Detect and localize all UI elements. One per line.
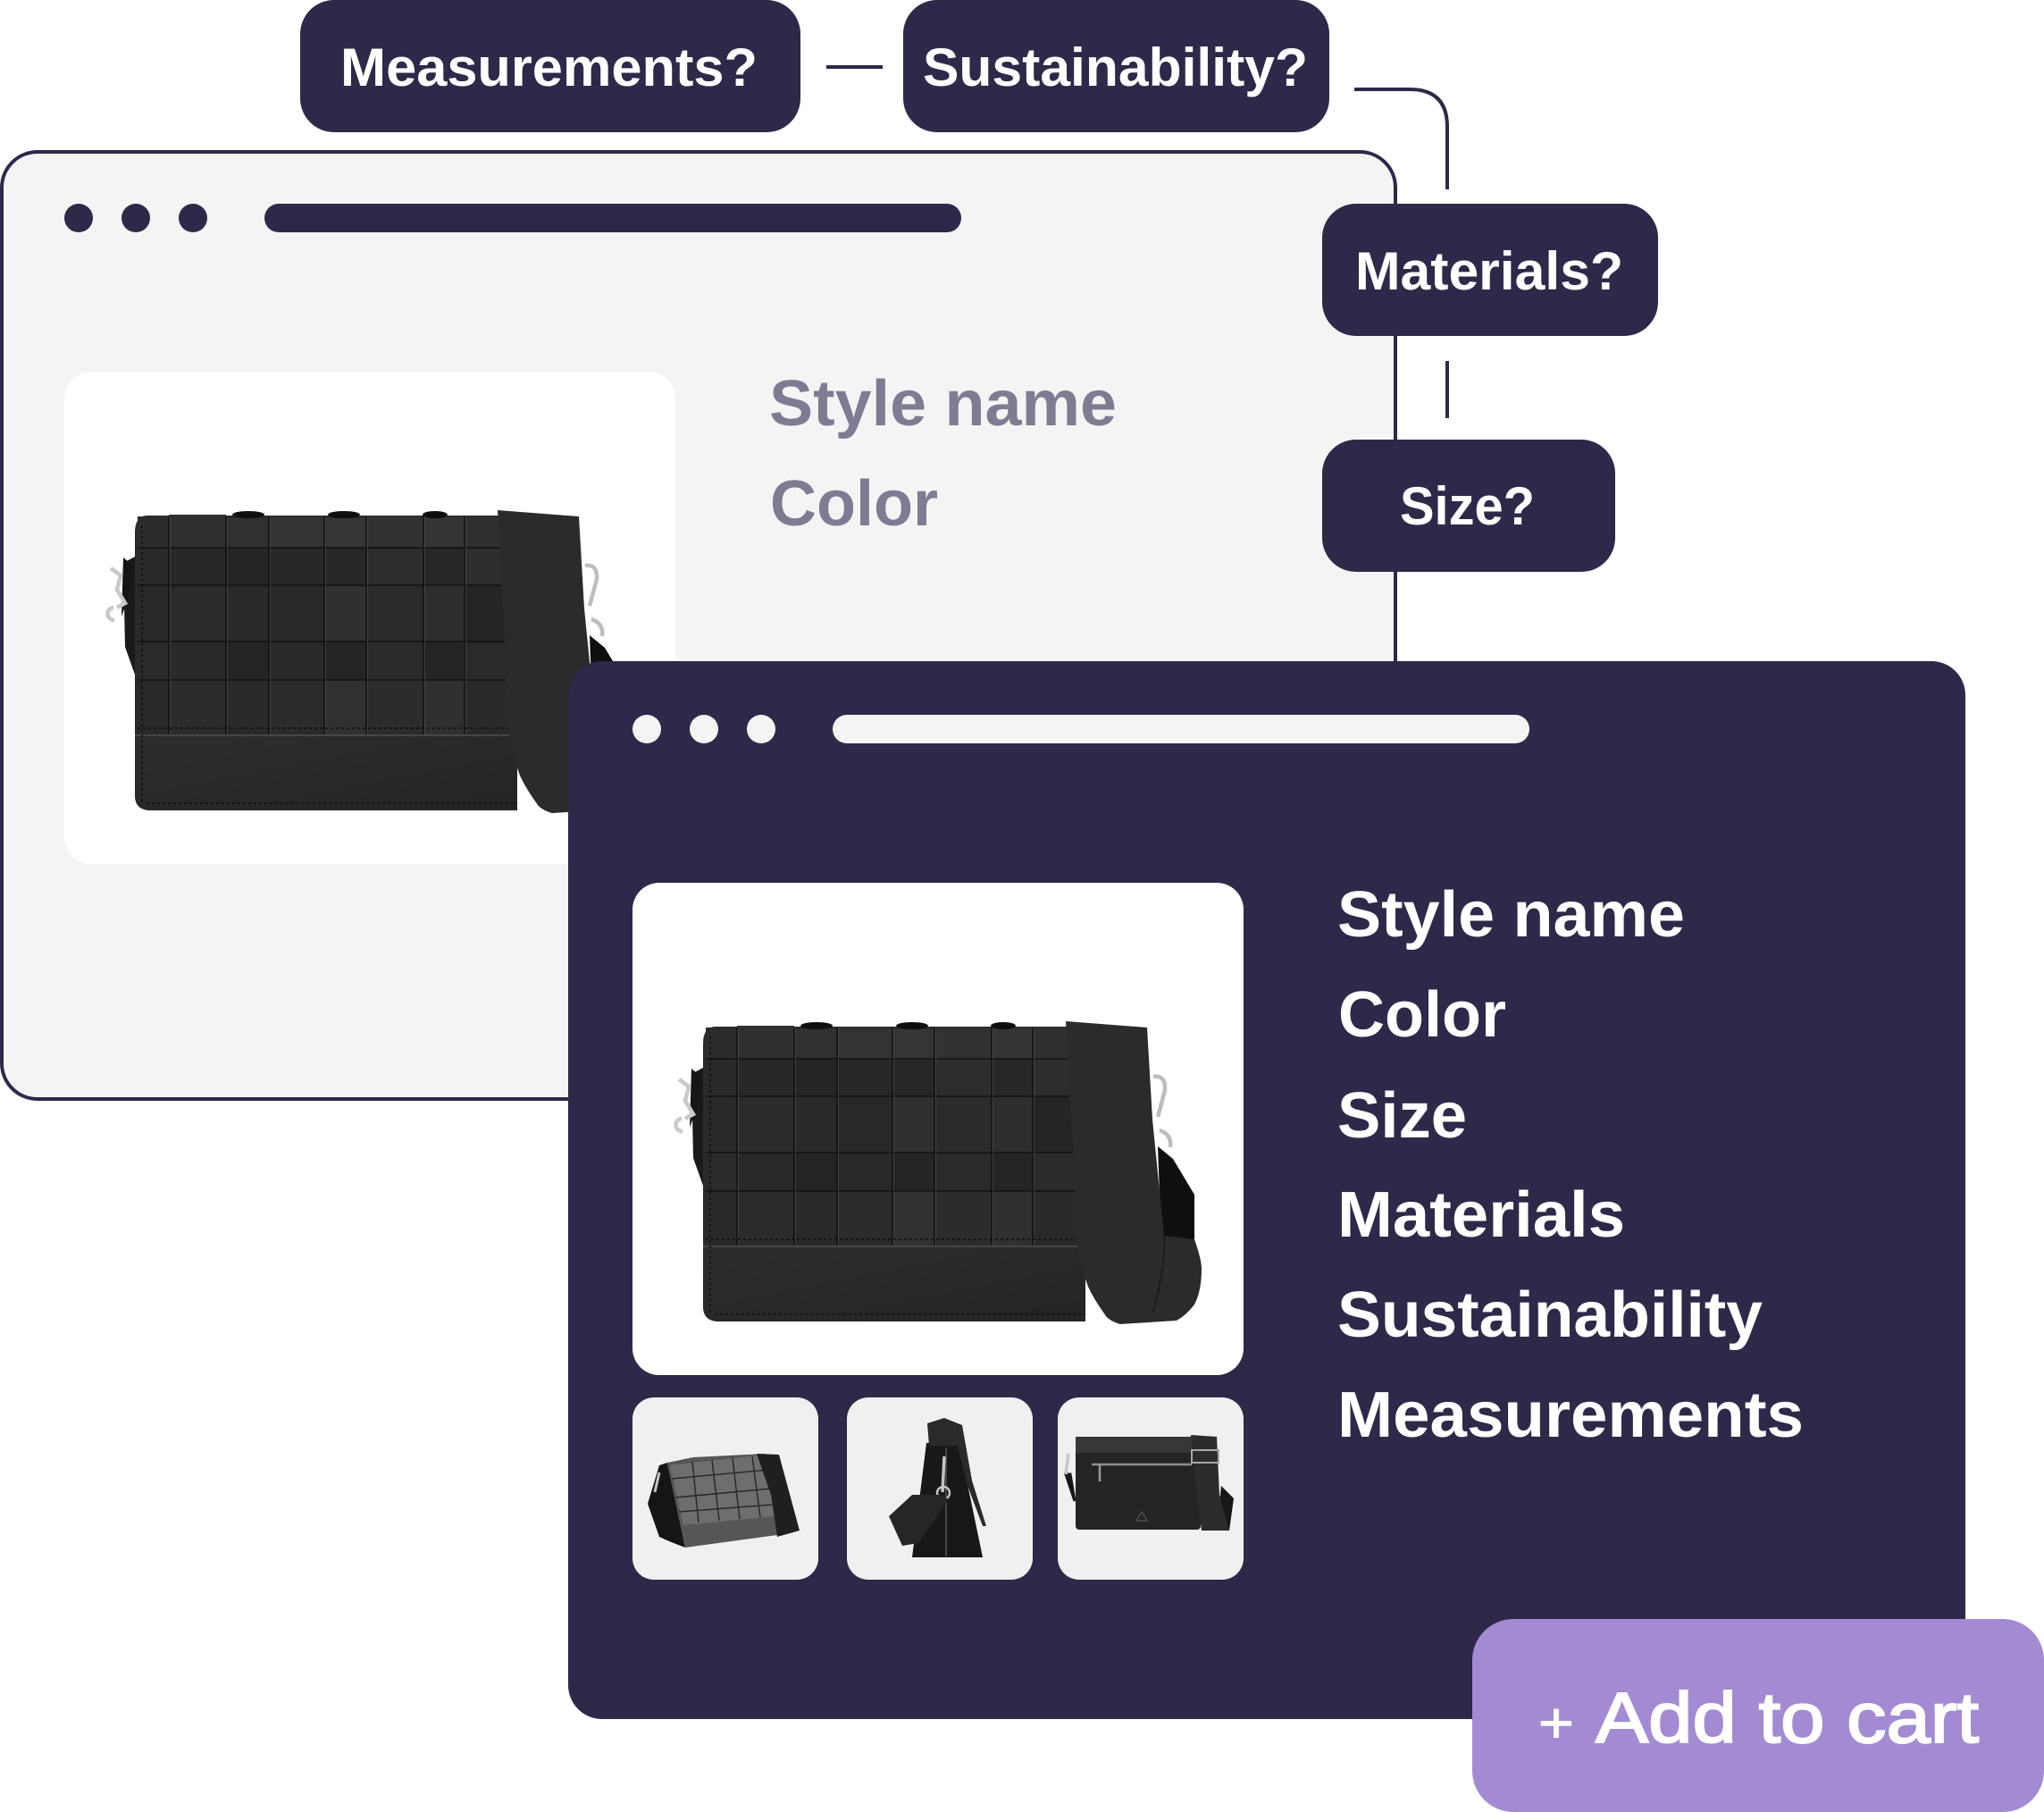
- button plus sign: +: [1538, 1690, 1574, 1755]
- address bar: [264, 204, 961, 232]
- connector: sustainability to materials: [1354, 89, 1447, 189]
- spec: color: Color: [1338, 979, 1506, 1051]
- button label: Add to cart: [1596, 1678, 1979, 1757]
- product image card: [632, 883, 1244, 1375]
- spec: size: Size: [1337, 1080, 1467, 1152]
- question pill: materials: [1322, 204, 1658, 336]
- question pill: size: Size?: [1400, 476, 1535, 536]
- thumbnail: angled view: [632, 1397, 818, 1580]
- text: style name: Style name: [769, 368, 1117, 440]
- question pill: materials: Materials?: [1355, 241, 1623, 301]
- product image card: [64, 372, 675, 864]
- question pill: measurements: [300, 0, 800, 132]
- connector: measurements to sustainability: [826, 65, 883, 69]
- window controls: [64, 204, 207, 232]
- address bar: [833, 715, 1529, 743]
- product photo: woven bag: [107, 510, 633, 813]
- question pill: measurements: Measurements?: [340, 38, 758, 97]
- spec list: [1337, 879, 1804, 1451]
- spec: style name: Style name: [1337, 879, 1685, 951]
- question pill: size: [1322, 440, 1615, 572]
- spec: measurements: Measurements: [1337, 1380, 1804, 1451]
- panel: back browser window: [2, 152, 1395, 1099]
- product photo: woven bag: [675, 1021, 1202, 1324]
- connector: materials to size: [1445, 361, 1449, 418]
- spec: sustainability: Sustainability: [1337, 1279, 1763, 1351]
- spec: materials: Materials: [1337, 1179, 1625, 1251]
- question pill: sustainability: [903, 0, 1329, 132]
- window controls: [632, 715, 775, 743]
- thumbnail: back view: [1058, 1397, 1244, 1580]
- question pill: sustainability: Sustainability?: [923, 38, 1308, 97]
- panel: front browser window: [568, 661, 1965, 1719]
- thumbnail: side view: [847, 1397, 1033, 1580]
- text: color: Color: [770, 468, 938, 540]
- add to cart button: [1472, 1619, 2044, 1812]
